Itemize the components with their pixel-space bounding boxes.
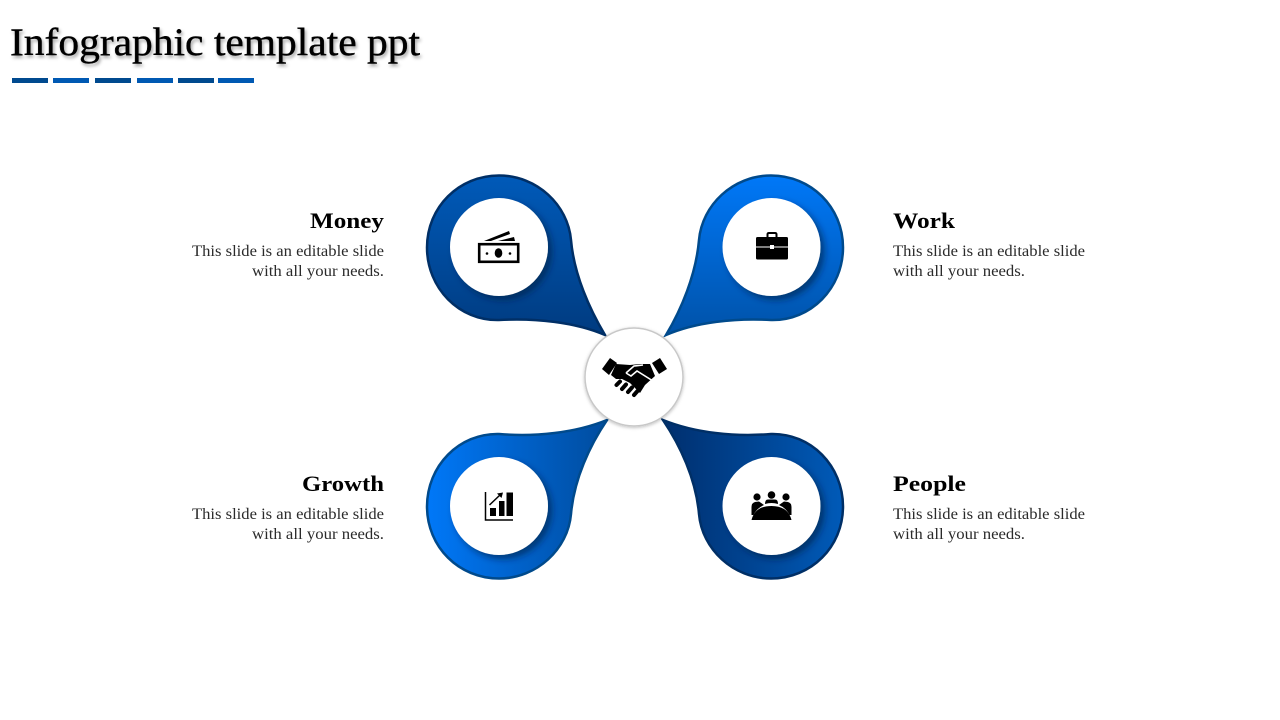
text block: growth	[192, 471, 385, 543]
title underline dashes	[12, 78, 254, 83]
text block: money	[192, 208, 385, 280]
people teardrop	[663, 420, 843, 578]
icon: briefcase	[756, 233, 788, 260]
growth teardrop	[427, 420, 607, 578]
panel: money	[427, 176, 605, 335]
text block: growth: This slide is an editable slide	[192, 506, 384, 523]
text block: people	[893, 471, 1085, 543]
icon: bar chart	[486, 492, 513, 520]
text block: money: This slide is an editable slide	[192, 243, 384, 260]
text block: people: with all your needs.	[893, 526, 1025, 543]
money teardrop	[427, 176, 605, 335]
people white disc	[722, 457, 820, 555]
growth white disc	[450, 457, 548, 555]
text block: growth: Growth	[302, 471, 385, 496]
icon: banknotes	[479, 231, 518, 262]
text block: money: with all your needs.	[252, 263, 384, 280]
text block: people: People	[893, 471, 966, 496]
text block: growth: with all your needs.	[252, 526, 384, 543]
text block: work: with all your needs.	[893, 263, 1025, 280]
text block: work: This slide is an editable slide	[893, 243, 1085, 260]
money white disc	[450, 198, 548, 296]
panel: work	[666, 176, 843, 335]
icon: people around table	[752, 491, 792, 520]
work teardrop	[666, 176, 843, 335]
panel: growth	[427, 420, 607, 578]
icon: handshake	[602, 358, 667, 395]
center circle	[585, 328, 683, 426]
title: Infographic template ppt	[10, 21, 420, 64]
text block: money: Money	[310, 208, 385, 233]
panel: people	[663, 420, 843, 578]
text block: work	[893, 208, 1085, 280]
text block: people: This slide is an editable slide	[893, 506, 1085, 523]
text block: work: Work	[893, 208, 956, 233]
work white disc	[722, 198, 820, 296]
